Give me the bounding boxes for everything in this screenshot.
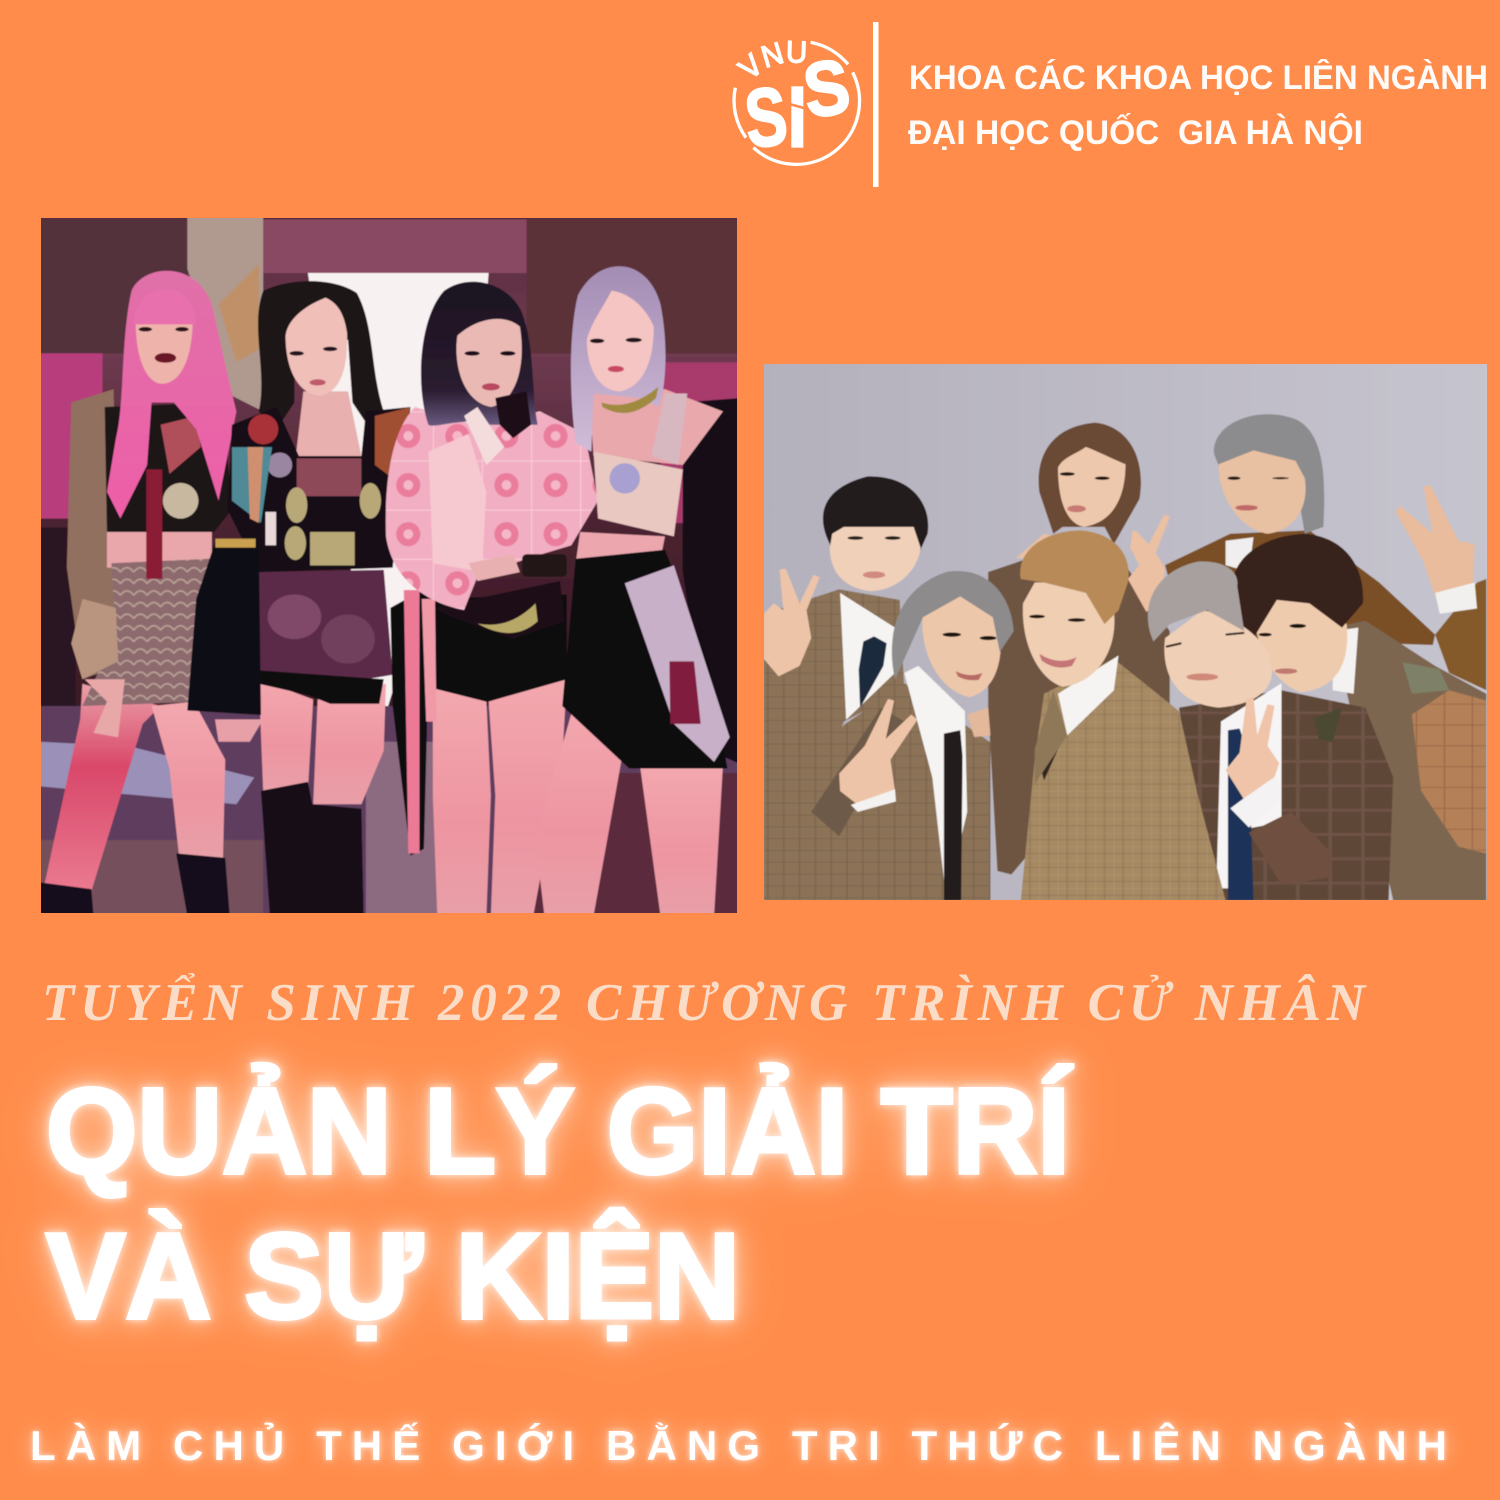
main title with glow: QUẢN LÝ GIẢI TRÍ (46, 1062, 1073, 1199)
studio backdrop (760, 360, 1491, 906)
subheading: admissions 2022: TUYỂN SINH 2022 CHƯƠNG TRÌNH CỬ NHÂN (42, 972, 1367, 1032)
header logo: VNU SIS: VNU (735, 40, 806, 76)
member: blond hair, centre (1020, 530, 1226, 901)
header logo: VNU SIS (732, 40, 862, 166)
hand: peace sign centre (1128, 515, 1170, 612)
tagline with glow: LÀM CHỦ THẾ GIỚI BẰNG TRI THỨC LIÊN NGÀNH (30, 1421, 1447, 1469)
figure: black bob hair member (386, 282, 598, 916)
header divider (873, 22, 878, 187)
member: silver hair, back right (1165, 414, 1486, 690)
main title with glow: VÀ SỰ KIỆN (46, 1208, 740, 1344)
member: grey hair, front left (764, 571, 1014, 901)
member: black hair, left (764, 476, 928, 847)
photo backdrop (40, 215, 741, 916)
header logo: VNU SIS: S (798, 43, 855, 135)
figure: dark hair member with pigtails (187, 281, 411, 916)
member: dark brown hair, right front (1232, 534, 1486, 901)
photo: girl group in hanbok (40, 215, 741, 916)
hand: peace sign right (1396, 485, 1475, 596)
header logo: VNU SIS: S (740, 69, 792, 166)
main title with glow (46, 1062, 1073, 1344)
figure: lavender hair member (536, 266, 740, 916)
figure: pink hair member (40, 271, 236, 916)
hand: peace sign left (764, 569, 820, 676)
member: brown hair, back centre (988, 423, 1170, 874)
header text: institution name (908, 59, 1488, 152)
header text: institution name: KHOA CÁC KHOA HỌC LIÊN NGÀNH (909, 59, 1488, 97)
header text: institution name: ĐẠI HỌC QUỐC GIA HÀ NỘI (908, 113, 1363, 152)
hand: peace sign front left (839, 699, 917, 805)
member: ash hair with closed eye (1148, 561, 1393, 901)
hand: peace sign front (1226, 697, 1279, 800)
photo: boy group in tweed suits (760, 360, 1491, 906)
